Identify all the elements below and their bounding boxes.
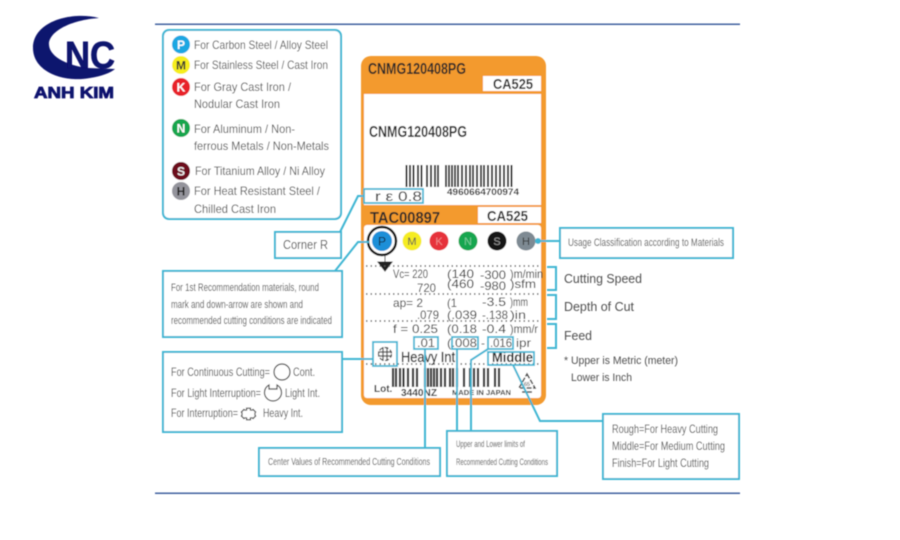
panel: material classes	[163, 30, 341, 219]
connector: interruption	[342, 358, 373, 360]
depth of cut values: -3.5	[482, 295, 506, 309]
cutting speed values: -300	[480, 268, 506, 282]
label lower white area	[364, 225, 541, 398]
cutting speed values: )m/min	[510, 267, 543, 281]
material marks row	[368, 227, 536, 255]
material marks row: K	[435, 236, 443, 248]
icon: light interruption circle	[264, 385, 282, 401]
depth of cut values: -.138	[482, 308, 508, 322]
material H: For Heat Resistant Steel /	[194, 184, 321, 198]
callout: upper and lower limits	[447, 431, 557, 476]
material marks row: S	[493, 236, 501, 248]
lot label: Lot.	[374, 384, 393, 395]
grade box middle	[478, 207, 541, 223]
callout: first recommendation	[163, 271, 342, 337]
heavy int label: Heavy Int	[401, 349, 456, 366]
callout: cutting classes: Finish=For Light Cutting	[612, 456, 709, 470]
callout: cutting classes: Rough=For Heavy Cutting	[612, 422, 718, 436]
arrow: recommended down arrow	[378, 256, 392, 271]
material K: For Gray Cast Iron /	[194, 80, 292, 94]
depth of cut values	[393, 295, 528, 322]
logo: CNC Anh Kim	[33, 16, 115, 102]
highlight: lower feed limit	[452, 337, 478, 349]
material M: For Stainless Steel / Cast Iron	[194, 58, 328, 72]
note: units: Lower is Inch	[571, 372, 632, 384]
connector: upper limit	[471, 349, 488, 431]
feed values: -	[481, 336, 485, 350]
highlight: corner radius value	[364, 189, 423, 203]
grade middle: CA525	[487, 208, 528, 225]
middle label: Middle	[492, 349, 533, 365]
material P: For Carbon Steel / Alloy Steel	[194, 38, 328, 52]
material marks row: M	[407, 236, 417, 248]
material S	[172, 162, 325, 180]
model code top: CNMG120408PG	[368, 61, 466, 78]
connector: usage classification	[535, 238, 560, 244]
callout: first recommendation: recommended cutting conditions are indicated	[171, 315, 332, 327]
callout: interruption types	[163, 352, 342, 432]
cutting speed values	[393, 267, 543, 295]
bottom rule	[155, 492, 740, 494]
material M	[172, 56, 328, 74]
material marks row: H	[522, 236, 530, 248]
label: feed: Feed	[564, 328, 592, 343]
material N: ferrous Metals / Non-Metals	[194, 139, 329, 153]
material S: For Titanium Alloy / Ni Alloy	[195, 164, 325, 178]
cutting speed values: -980	[480, 279, 506, 293]
callout: centre values: Center Values of Recommended Cutting Conditions	[268, 457, 430, 468]
callout: interruption types: Cont.	[293, 365, 315, 379]
connector: lower limit	[456, 349, 458, 431]
corner radius value: r ε 0.8	[375, 188, 422, 204]
feed values: (0.18	[447, 322, 477, 336]
connector: centre values	[424, 349, 426, 448]
material K	[172, 78, 292, 111]
cutting speed values: )sfm	[510, 277, 536, 291]
depth of cut values: .079	[417, 308, 439, 322]
callout: interruption types: For Interruption=	[171, 406, 238, 420]
connector: corner R	[340, 196, 364, 232]
connector: cutting class	[513, 365, 603, 421]
depth of cut values: )in	[510, 308, 526, 322]
label: cutting speed: Cutting Speed	[564, 271, 642, 286]
material N	[172, 119, 329, 153]
cutting speed values: (460	[447, 277, 474, 291]
feed values	[393, 322, 538, 350]
material P	[172, 36, 328, 54]
highlight: heavy int icon	[373, 342, 397, 366]
callout: cutting classes	[603, 414, 739, 479]
lot number: 3440NZ	[401, 387, 438, 399]
origin text: MADE IN JAPAN	[452, 390, 511, 397]
note: units	[564, 355, 678, 384]
feed values: ipr	[516, 336, 531, 350]
material H	[172, 182, 321, 216]
highlight: centre feed value	[414, 337, 438, 349]
feed values: -0.4	[482, 322, 506, 336]
material H: Chilled Cast Iron	[194, 202, 276, 216]
barcode digits: 4960664700974	[447, 187, 519, 197]
depth of cut values: (.039	[447, 308, 477, 322]
highlight: upper feed limit	[488, 337, 513, 349]
logo letters: NC	[65, 35, 115, 77]
callout: interruption types: Light Int.	[285, 386, 320, 400]
feed values: .01	[417, 336, 435, 350]
barcode top	[406, 165, 512, 187]
feed values: .016	[490, 336, 512, 350]
icon: recycle mark: 65	[524, 382, 530, 388]
depth of cut values: ap= 2	[393, 296, 423, 310]
material marks row: N	[464, 236, 472, 248]
connector: first recommendation	[335, 242, 369, 271]
top rule	[155, 24, 740, 25]
material S: S	[177, 164, 185, 178]
material P: P	[177, 38, 185, 52]
bracket: feed	[547, 324, 556, 348]
material N: For Aluminum / Non-	[194, 122, 295, 136]
feed values: f = 0.25	[393, 322, 438, 336]
logo name: ANH KIM	[34, 85, 114, 102]
model code centre: CNMG120408PG	[369, 124, 467, 141]
callout: usage classification: Usage Classification according to Materials	[568, 237, 724, 249]
barcode bottom	[393, 368, 499, 387]
cutting speed values: (140	[447, 267, 474, 281]
grade box top	[483, 76, 541, 91]
note: units: * Upper is Metric (meter)	[564, 355, 678, 367]
material K: Nodular Cast Iron	[194, 97, 280, 111]
material H: H	[177, 184, 185, 198]
callout: interruption types: For Continuous Cutting=	[171, 365, 270, 379]
material M: M	[176, 58, 186, 72]
callout: corner R	[275, 232, 341, 258]
bracket: depth of cut	[547, 295, 556, 319]
callout: first recommendation: mark and down-arrow are shown and	[171, 299, 303, 311]
logo crescent	[33, 16, 115, 79]
callout: usage classification	[560, 228, 733, 258]
label body	[361, 56, 546, 405]
icon: recycle mark	[519, 374, 535, 392]
bracket: cutting speed	[547, 267, 556, 290]
depth of cut values: (1	[447, 296, 457, 310]
icon: heavy interruption mark	[378, 347, 392, 361]
callout: cutting classes: Middle=For Medium Cutting	[612, 439, 725, 453]
icon: heavy interruption gear	[241, 408, 256, 420]
feed values: )mm/r	[510, 322, 538, 336]
part number: TAC00897	[370, 210, 440, 227]
material N: N	[177, 122, 185, 136]
depth of cut values: )mm	[510, 295, 528, 309]
callout: interruption types: For Light Interruption=	[171, 386, 261, 400]
label top white area	[364, 94, 541, 205]
callout: interruption types: Heavy Int.	[263, 406, 303, 420]
material K: K	[177, 80, 186, 94]
label: depth of cut: Depth of Cut	[564, 299, 634, 314]
callout: upper and lower limits: Recommended Cutting Conditions	[456, 457, 548, 468]
cutting speed values: Vc= 220	[393, 267, 428, 281]
cutting speed values: 720	[417, 281, 436, 295]
callout: corner R: Corner R	[283, 237, 328, 252]
grade top: CA525	[493, 76, 533, 93]
dotted separators	[366, 266, 540, 364]
material marks row: P	[378, 234, 386, 248]
feed values: (.008	[447, 336, 477, 350]
insert box label	[361, 56, 546, 405]
callout: centre values	[259, 448, 440, 476]
highlight: middle class	[488, 352, 534, 365]
callout: upper and lower limits: Upper and Lower limits of	[456, 439, 525, 450]
callout: first recommendation: For 1st Recommendation materials, round	[171, 282, 319, 294]
icon: continuous circle	[274, 364, 290, 380]
